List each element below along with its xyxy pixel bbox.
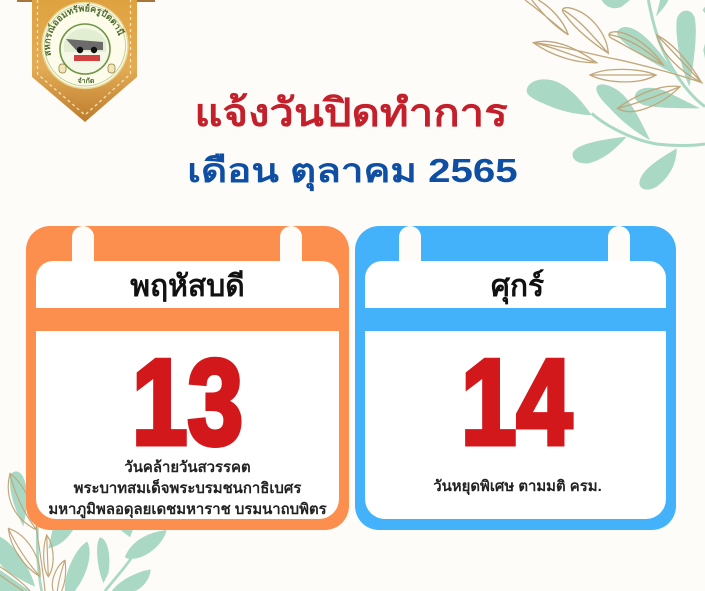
decorative leaves: bottom left: [0, 471, 167, 591]
logo seal: สหกรณ์ออมทรัพย์ครูปัตตานี: [44, 3, 126, 56]
calendar binding tab: [72, 226, 94, 266]
day name: ศุกร์: [491, 270, 544, 303]
day header: [36, 261, 339, 308]
logo seal: จำกัด: [78, 77, 95, 85]
panel: Friday calendar: [355, 226, 676, 530]
day header: [365, 261, 666, 308]
title: แจ้งวันปิดทำการ: [194, 92, 508, 135]
logo seal: [41, 2, 129, 90]
date sheet: [36, 331, 339, 519]
decorative leaves: top right: [524, 0, 705, 190]
day name: พฤหัสบดี: [130, 270, 245, 303]
calendar binding tab: [280, 226, 302, 266]
holiday description: มหาภูมิพลอดุลยเดชมหาราช บรมนาถบพิตร: [48, 502, 327, 518]
holiday description: [48, 459, 327, 518]
date number: 13: [132, 334, 243, 470]
holiday description: พระบาทสมเด็จพระบรมชนกาธิเบศร: [74, 481, 301, 497]
subtitle: เดือน ตุลาคม 2565: [187, 152, 518, 189]
calendar binding tab: [399, 226, 421, 266]
logo ribbon badge: [17, 0, 155, 122]
date number: 14: [461, 334, 572, 470]
holiday description: วันหยุดพิเศษ ตามมติ ครม.: [433, 479, 602, 495]
holiday description: วันคล้ายวันสวรรคต: [124, 460, 251, 476]
panel: Thursday calendar: [26, 226, 349, 530]
calendar binding tab: [608, 226, 630, 266]
date sheet: [365, 331, 666, 519]
